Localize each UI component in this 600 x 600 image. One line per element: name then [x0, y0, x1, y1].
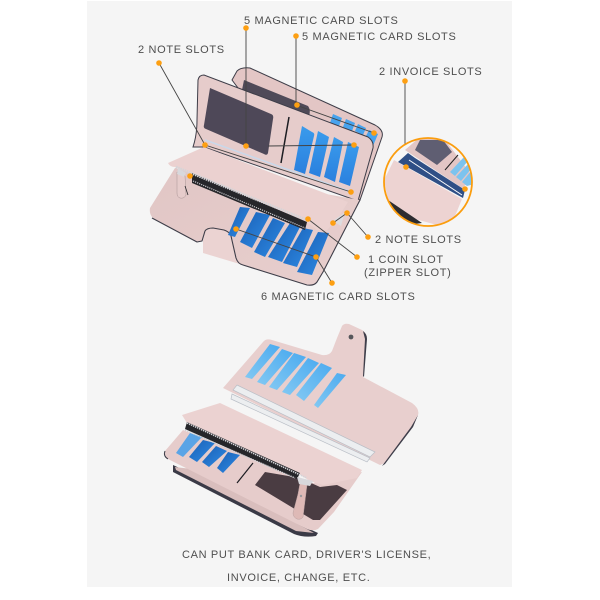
- label: 2 note slots right: 2 NOTE SLOTS: [375, 234, 462, 246]
- caption: INVOICE, CHANGE, ETC.: [227, 572, 370, 584]
- zipper: [176, 167, 307, 230]
- window: [255, 472, 347, 520]
- label: 2 note slots right: [330, 210, 462, 246]
- flap cards: [294, 126, 359, 186]
- back panel: [232, 68, 382, 200]
- bank notes: [231, 385, 375, 462]
- caption: [182, 549, 431, 584]
- front flap: [182, 403, 362, 485]
- middle flap: [193, 75, 373, 201]
- zipper: [185, 422, 307, 479]
- id window: [204, 88, 273, 155]
- caption: CAN PUT BANK CARD, DRIVER'S LICENSE,: [182, 549, 431, 561]
- label: 5 magnetic card slots upper: 5 MAGNETIC CARD SLOTS: [302, 31, 456, 43]
- label: 2 note slots left: [138, 44, 354, 195]
- back panel window: [242, 80, 310, 116]
- bottom panel outline: [152, 200, 360, 285]
- main panel: [223, 324, 418, 465]
- snap button: [349, 335, 353, 339]
- zipper pull: [293, 477, 313, 519]
- zipper flap: [168, 147, 348, 230]
- label: 5 magnetic card slots: 5 MAGNETIC CARD SLOTS: [244, 15, 398, 27]
- note slot edge: [205, 140, 351, 192]
- label: 2 note slots left: 2 NOTE SLOTS: [138, 44, 225, 56]
- inner lower panel: [164, 430, 362, 530]
- upper cards: [245, 344, 346, 408]
- background panel: [87, 1, 512, 587]
- label: 1 coin slot: (ZIPPER SLOT): [364, 267, 451, 279]
- slit: [237, 463, 253, 483]
- label: 2 invoice slots: [379, 66, 482, 167]
- label: 5 magnetic card slots upper: [293, 31, 456, 136]
- back panel cards: [330, 114, 378, 146]
- lower pink sliver: [175, 467, 314, 533]
- label: 6 magnetic card slots: 6 MAGNETIC CARD SLOTS: [261, 291, 415, 303]
- lower panel left outline: [164, 451, 168, 459]
- lower dark edge: [173, 465, 318, 537]
- label: 5 magnetic card slots: [243, 15, 398, 149]
- label: 1 coin slot: 1 COIN SLOT: [368, 254, 444, 266]
- lower cards: [228, 207, 329, 275]
- label: 2 invoice slots: 2 INVOICE SLOTS: [379, 66, 482, 78]
- tab: [203, 228, 243, 265]
- bottom wallet illustration: [164, 324, 418, 537]
- lower cards: [176, 433, 240, 473]
- label: 6 magnetic card slots: [233, 226, 415, 303]
- top wallet illustration: [150, 68, 382, 285]
- slit: [281, 117, 289, 163]
- inset circle: [384, 136, 474, 226]
- bottom panel: [150, 168, 360, 285]
- right side small note pockets: [333, 212, 345, 226]
- label: 1 coin slot: [187, 173, 451, 279]
- zipper pull: [177, 168, 188, 198]
